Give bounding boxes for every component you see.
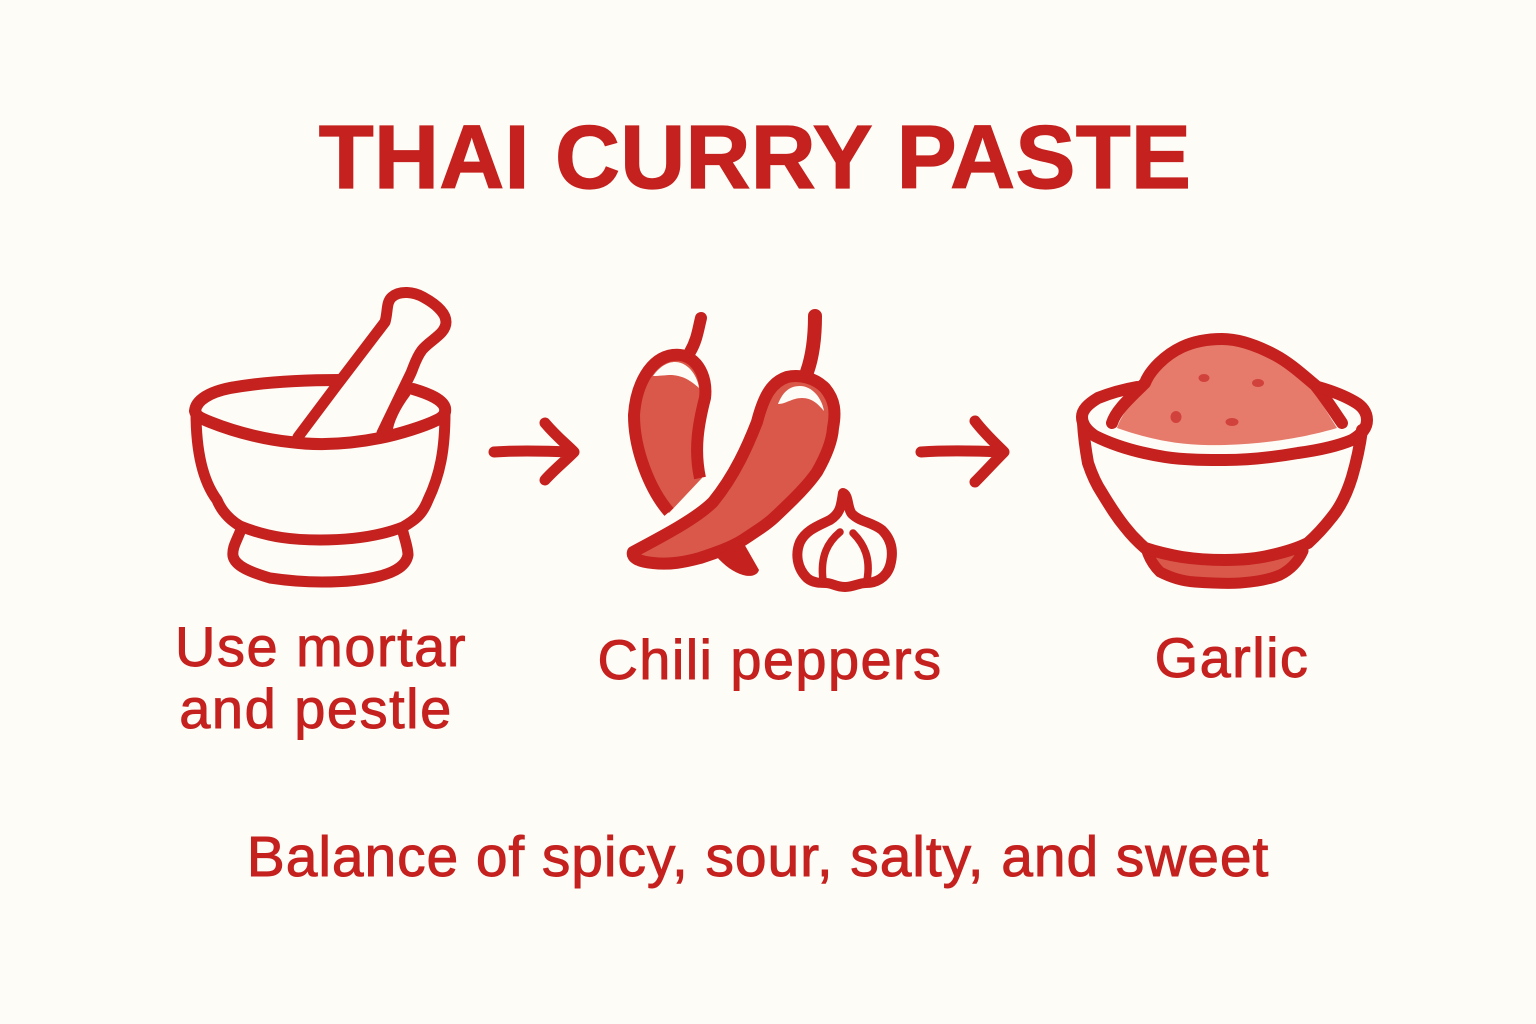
label: mortar and pestle: and pestle xyxy=(179,677,453,740)
icon: mortar and pestle xyxy=(195,292,446,582)
title: THAI CURRY PASTE xyxy=(319,108,1191,208)
label: mortar and pestle: Use mortar xyxy=(175,615,467,678)
label: mortar and pestle xyxy=(175,615,467,740)
icon: garlic xyxy=(797,493,892,587)
icon: bowl of paste xyxy=(1082,339,1367,583)
label: garlic: Garlic xyxy=(1155,626,1309,689)
arrow 2 xyxy=(921,421,1004,482)
label: chili peppers: Chili peppers xyxy=(597,628,943,691)
arrow 1 xyxy=(494,423,574,480)
tagline: Balance of spicy, sour, salty, and sweet xyxy=(247,825,1269,889)
icon: chili peppers xyxy=(633,316,834,576)
